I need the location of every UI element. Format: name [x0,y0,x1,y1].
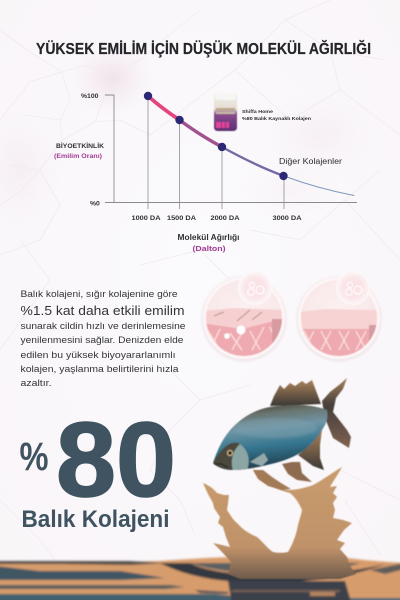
illustration: water surface [0,557,400,600]
text block: fish collagen absorption: azaltır. [20,378,52,388]
y axis title: (Emilim Oranı) [54,153,102,160]
icon: product jar [214,93,237,131]
text block: fish collagen absorption: Balık kolajeni, sığır kolajenine göre [20,289,178,299]
x axis labels: 3000 DA [272,215,302,222]
lower rear fin [298,430,324,470]
text block: fish collagen absorption: %1.5 kat daha etkili emilim [20,304,184,318]
y axis title [54,142,104,160]
front fin [253,470,291,490]
x axis labels [132,215,302,222]
text block: fish collagen absorption: sunarak cildin hızlı ve derinlemesine [20,321,186,331]
heading: fish collagen: Balık Kolajeni [22,506,170,533]
x axis labels: 2000 DA [210,215,240,222]
illustration: jumping fish [212,378,351,490]
text block: fish collagen absorption: kolajen, yaşlanma belirtilerini hızla [20,364,179,374]
curve [148,96,354,196]
text block: fish collagen absorption: yenilenmesini sağlar. Denizden elde [20,335,184,345]
x axis [105,202,357,204]
belly fin [282,462,312,482]
title: YÜKSEK EMİLİM İÇİN DÜŞÜK MOLEKÜL AĞIRLIĞI [36,40,371,58]
x axis labels: 1000 DA [132,215,161,222]
y axis [105,95,114,202]
product label [242,109,311,121]
data points [144,92,288,180]
product label: %80 Balık Kaynaklı Kolajen [242,116,311,121]
chart: bioactivity against molecular weight [54,92,357,253]
big stat: 80 percent: % [20,435,48,479]
label: other collagens: Diğer Kolajenler [279,157,342,166]
text block: fish collagen absorption [20,289,186,388]
icon: damaged skin circle [202,272,286,362]
illustration: water splash [203,467,356,579]
x axis title: (Dalton) [192,244,226,253]
y axis label 100 percent: %100 [81,93,99,100]
x axis title: Molekül Ağırlığı [178,233,240,242]
fish body [213,405,327,470]
x axis title [178,233,240,253]
product label: Shiffa Home [242,109,273,114]
text block: fish collagen absorption: edilen bu yüksek biyoyararlanımlı [20,350,176,360]
drop lines [148,96,284,209]
tail [322,378,351,448]
icon: renewed skin circle [296,272,382,362]
x axis labels: 1500 DA [167,215,196,222]
y axis title: BİYOETKİNLİK [56,142,104,150]
big stat: 80 percent: 80 [56,401,176,519]
y axis label 0 percent: %0 [90,200,100,208]
dorsal fin [270,380,321,406]
